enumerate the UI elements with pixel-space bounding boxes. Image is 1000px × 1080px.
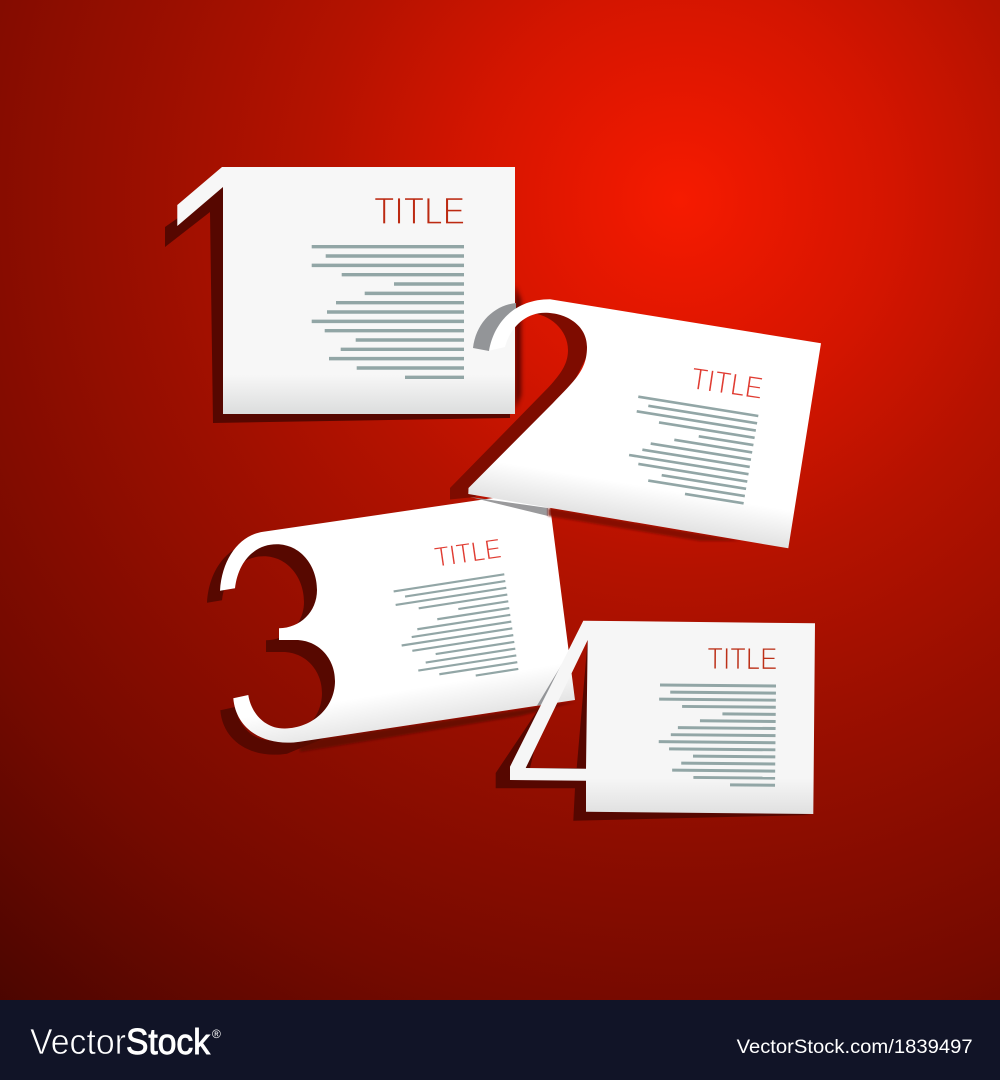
digit 2 shadow [450, 300, 595, 500]
paper with digit 4 [510, 621, 815, 814]
title: TITLE [707, 641, 777, 676]
image id: VectorStock.com/1839497 [737, 1037, 973, 1058]
logo: VectorStock: Vector [30, 1021, 126, 1062]
digit 3 shadow [207, 524, 387, 755]
digit 1 shadow [165, 185, 510, 423]
bottom edge shadow [300, 702, 575, 752]
paper with digit 3 [220, 490, 575, 743]
text lines [624, 397, 758, 503]
shadow on step 3 card [537, 664, 562, 706]
footer bar [0, 1000, 1000, 1080]
paper with digit 2 [468, 299, 821, 548]
paper with digit 1 [177, 167, 515, 414]
text lines [394, 574, 518, 686]
logo: VectorStock [30, 1021, 221, 1062]
shadow on step 3 card [470, 497, 548, 516]
shadow on background [548, 508, 740, 541]
title: TITLE [374, 191, 465, 233]
text lines [658, 685, 776, 785]
shadow on step 1 card: hook [473, 303, 516, 351]
panel: step 3 card [207, 490, 575, 755]
title: TITLE [432, 533, 503, 573]
digit 4 shadow [496, 640, 812, 821]
panel: step 1 card [165, 167, 521, 423]
title: TITLE [689, 361, 765, 406]
text lines [312, 247, 464, 377]
panel: step 2 card [450, 299, 821, 548]
panel: step 4 card [496, 621, 815, 821]
logo: VectorStock: ® [212, 1027, 221, 1041]
right edge shadow [515, 285, 521, 410]
logo: VectorStock: Stock [126, 1021, 211, 1062]
